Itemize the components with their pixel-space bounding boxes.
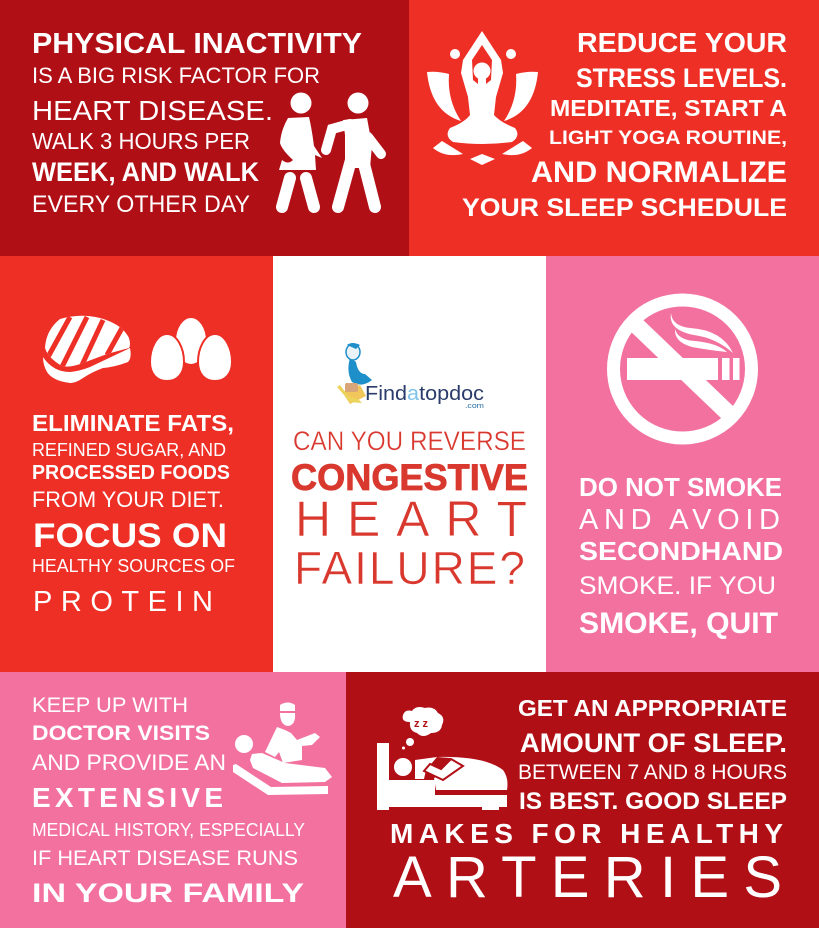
text: sleep: ARTERIES bbox=[393, 845, 782, 910]
text: physical inactivity: EVERY OTHER DAY bbox=[32, 191, 250, 218]
text: sleep: IS BEST. GOOD SLEEP bbox=[519, 788, 787, 815]
panel: sleep bbox=[346, 672, 819, 928]
text: do not smoke bbox=[579, 472, 783, 640]
icon: doctor with patient bbox=[233, 702, 332, 795]
title: can you reverse congestive heart failure: HEART bbox=[295, 491, 527, 547]
text: do not smoke: DO NOT SMOKE bbox=[579, 472, 782, 502]
panel: center title bbox=[273, 256, 546, 672]
logo: Findatopdoc: .com bbox=[465, 401, 484, 410]
title: can you reverse congestive heart failure: FAILURE? bbox=[294, 542, 525, 594]
icon: eggs bbox=[150, 317, 232, 381]
text: reduce stress: AND NORMALIZE bbox=[531, 156, 787, 189]
icon: steak bbox=[43, 316, 131, 383]
text: reduce stress bbox=[462, 27, 787, 222]
text: physical inactivity: HEART DISEASE. bbox=[32, 95, 273, 126]
logo: Findatopdoc: Findatopdoc bbox=[365, 383, 484, 405]
text: physical inactivity: WALK 3 HOURS PER bbox=[32, 128, 250, 154]
icon: person sleeping in bed: z z bbox=[414, 718, 429, 730]
text: doctor visits: IF HEART DISEASE RUNS bbox=[32, 847, 298, 870]
text: do not smoke: AND AVOID bbox=[579, 504, 780, 536]
text: diet: FOCUS ON bbox=[33, 517, 227, 555]
text: diet: HEALTHY SOURCES OF bbox=[32, 556, 235, 576]
text: physical inactivity bbox=[32, 28, 362, 218]
text: doctor visits: EXTENSIVE bbox=[32, 782, 223, 813]
title: can you reverse congestive heart failure bbox=[291, 426, 528, 594]
panel: do not smoke bbox=[546, 256, 819, 672]
text: physical inactivity: PHYSICAL INACTIVITY bbox=[32, 28, 362, 60]
text: reduce stress: YOUR SLEEP SCHEDULE bbox=[462, 194, 787, 222]
text: doctor visits: KEEP UP WITH bbox=[32, 694, 188, 717]
text: doctor visits: AND PROVIDE AN bbox=[32, 750, 226, 775]
text: sleep: BETWEEN 7 AND 8 HOURS bbox=[518, 761, 787, 784]
panel: reduce stress bbox=[409, 0, 819, 256]
icon: person sleeping in bed bbox=[377, 707, 508, 810]
title: can you reverse congestive heart failure: CONGESTIVE bbox=[291, 457, 528, 498]
title: can you reverse congestive heart failure: CAN YOU REVERSE bbox=[293, 426, 526, 456]
text: sleep: GET AN APPROPRIATE bbox=[518, 695, 787, 721]
text: doctor visits: IN YOUR FAMILY bbox=[32, 878, 304, 908]
panel: diet bbox=[0, 256, 273, 672]
text: diet: ELIMINATE FATS, bbox=[32, 410, 234, 436]
text: reduce stress: MEDITATE, START A bbox=[550, 95, 787, 121]
text: sleep: AMOUNT OF SLEEP. bbox=[520, 728, 787, 758]
text: diet bbox=[32, 410, 235, 618]
text: do not smoke: SECONDHAND bbox=[579, 536, 783, 566]
text: reduce stress: REDUCE YOUR bbox=[577, 27, 787, 58]
text: doctor visits bbox=[32, 694, 305, 908]
text: diet: FROM YOUR DIET. bbox=[32, 487, 224, 512]
text: diet: PROCESSED FOODS bbox=[32, 462, 230, 484]
text: reduce stress: LIGHT YOGA ROUTINE, bbox=[549, 128, 787, 149]
text: do not smoke: SMOKE, QUIT bbox=[579, 607, 778, 640]
panel: doctor visits bbox=[0, 672, 346, 928]
text: do not smoke: SMOKE. IF YOU bbox=[579, 572, 776, 600]
text: doctor visits: DOCTOR VISITS bbox=[32, 722, 210, 745]
text: doctor visits: MEDICAL HISTORY, ESPECIALLY bbox=[32, 820, 305, 840]
text: sleep: MAKES FOR HEALTHY bbox=[390, 818, 783, 849]
panel: physical inactivity bbox=[0, 0, 409, 256]
icon: meditating figure on lotus bbox=[427, 31, 538, 165]
icon: two people walking bbox=[279, 92, 381, 207]
text: physical inactivity: IS A BIG RISK FACTOR FOR bbox=[32, 63, 320, 88]
text: diet: PROTEIN bbox=[33, 586, 213, 618]
text: physical inactivity: WEEK, AND WALK bbox=[32, 157, 259, 187]
text: sleep bbox=[390, 695, 787, 910]
icon: no smoking sign bbox=[614, 300, 752, 438]
text: reduce stress: STRESS LEVELS. bbox=[576, 63, 787, 93]
text: diet: REFINED SUGAR, AND bbox=[32, 440, 226, 460]
logo: Findatopdoc bbox=[337, 343, 484, 410]
